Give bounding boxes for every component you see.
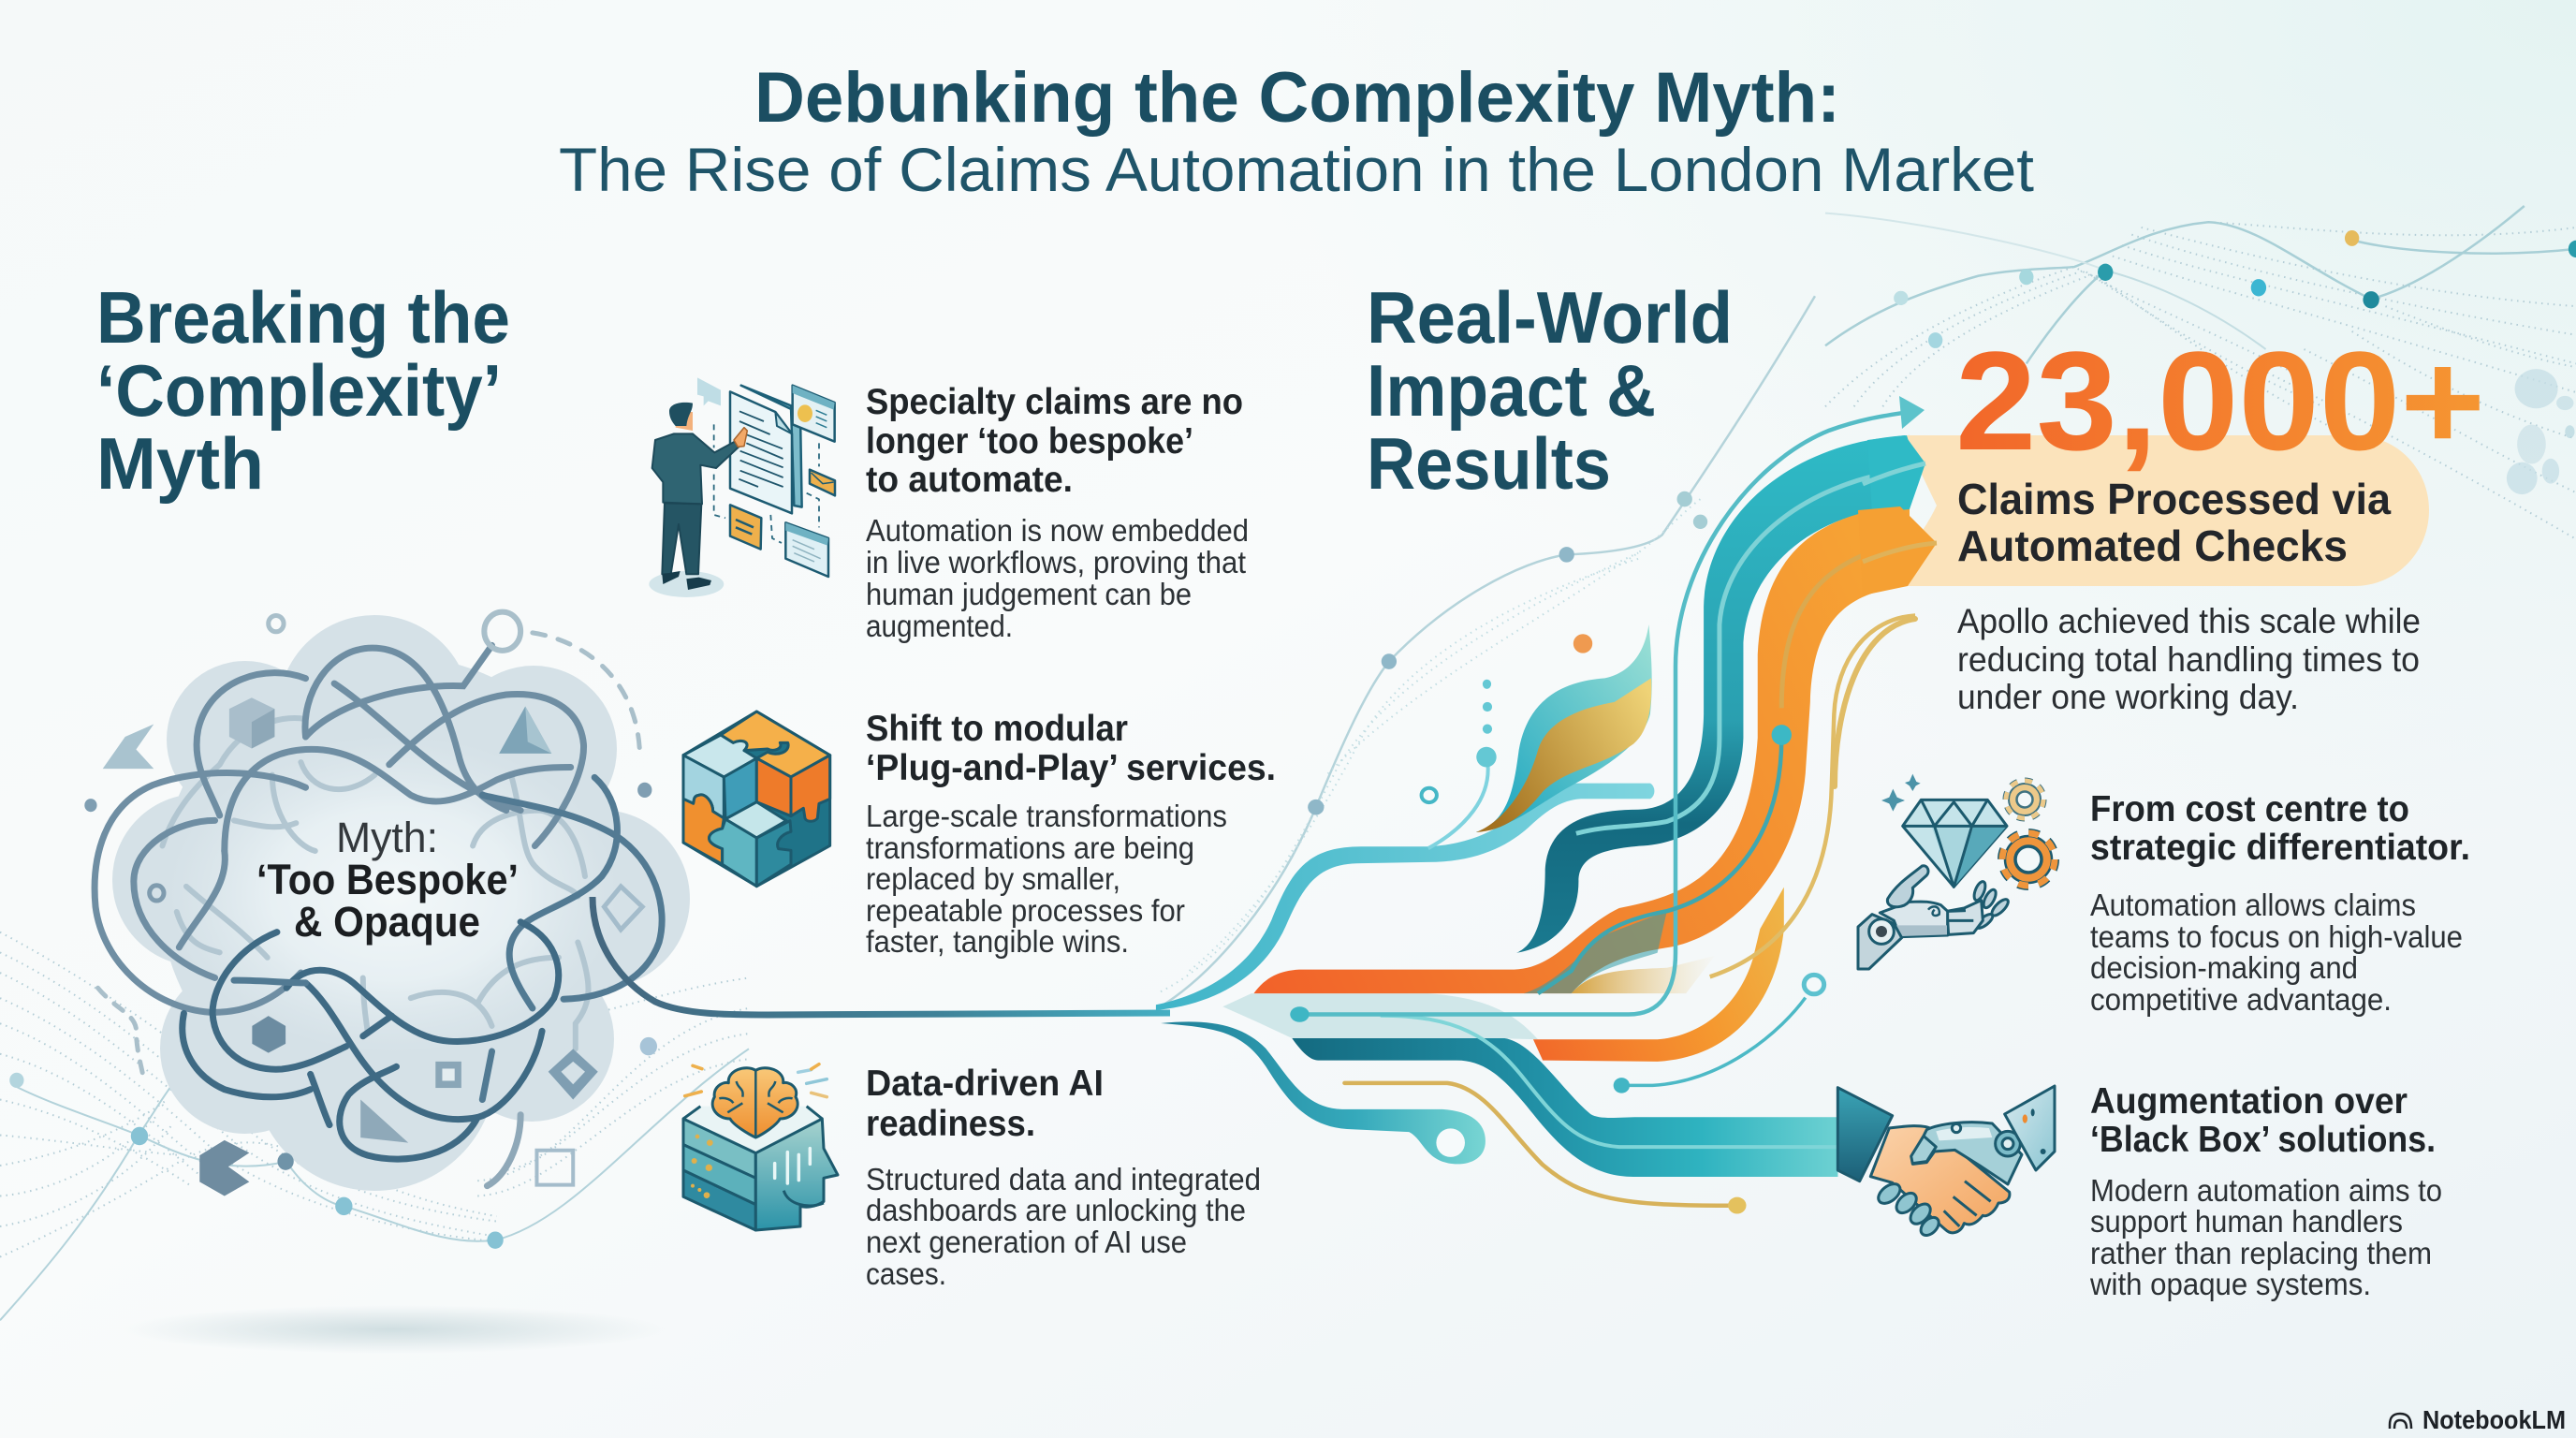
text: AI readiness: Data-driven AI — [866, 1064, 1104, 1104]
myth label: & Opaque — [294, 898, 480, 946]
text: strategic differentiator — [2090, 789, 2470, 1017]
heading: breaking the complexity myth: Breaking the — [96, 276, 510, 359]
tangled lines — [95, 612, 662, 1186]
text: augmentation: support human handlers — [2090, 1204, 2403, 1239]
lower curl ribbon — [1161, 1021, 1486, 1164]
icon: human and robot handshake — [1837, 1086, 2055, 1239]
text: AI readiness: next generation of AI use — [866, 1225, 1187, 1259]
icon: NotebookLM logo — [2390, 1414, 2411, 1429]
text: specialty claims: in live workflows, proving that — [866, 545, 1246, 580]
heading: real-world impact and results: Impact & — [1367, 349, 1656, 432]
heading: breaking the complexity myth — [96, 276, 510, 505]
stat label — [1957, 475, 2391, 570]
icon: man with documents — [649, 377, 835, 597]
title: Debunking the Complexity Myth: — [754, 58, 1840, 138]
icon: diamond and robot hand — [1858, 774, 2011, 969]
text: modular services: ‘Plug-and-Play’ services. — [866, 748, 1276, 788]
gold line — [1710, 615, 1915, 976]
title — [559, 58, 2034, 204]
small shapes around the knot — [9, 697, 657, 1249]
cloud shape — [112, 615, 690, 1191]
text: specialty claims: human judgement can be — [866, 577, 1192, 611]
text: AI readiness — [866, 1064, 1261, 1291]
text: strategic differentiator: decision-making and — [2090, 950, 2358, 985]
dark to teal main ribbon — [1516, 435, 1910, 953]
text: specialty claims: augmented. — [866, 609, 1013, 643]
title: The Rise of Claims Automation in the London Market — [559, 135, 2034, 204]
heading: real-world impact and results: Real-World — [1367, 276, 1733, 359]
text: augmentation: ‘Black Box’ solutions. — [2090, 1120, 2436, 1160]
text: specialty claims: Specialty claims are no — [866, 382, 1243, 422]
heading: breaking the complexity myth: ‘Complexity’ — [96, 349, 502, 432]
text: modular services: replaced by smaller, — [866, 861, 1120, 896]
text: modular services — [866, 709, 1276, 959]
text: AI readiness: readiness. — [866, 1104, 1035, 1144]
orange main ribbon — [1253, 506, 1910, 993]
text: specialty claims: to automate. — [866, 460, 1073, 500]
teal connector — [1621, 998, 1806, 1085]
text: modular services: transformations are being — [866, 830, 1194, 865]
text: augmentation: Augmentation over — [2090, 1081, 2408, 1122]
stat label: Automated Checks — [1957, 521, 2348, 570]
text: strategic differentiator: competitive advantage. — [2090, 982, 2392, 1017]
flame — [1476, 624, 1652, 832]
panel: tangled myth cloud — [9, 612, 690, 1249]
gold lower line — [1344, 1083, 1736, 1206]
text: modular services: Large-scale transformations — [866, 799, 1227, 833]
stat description: under one working day. — [1957, 678, 2299, 716]
text: specialty claims — [866, 382, 1249, 643]
heading: breaking the complexity myth: Myth — [96, 422, 264, 505]
light teal ribbon — [1156, 784, 1654, 1010]
text: augmentation: with opaque systems. — [2089, 1267, 2371, 1301]
text: AI readiness: cases. — [866, 1256, 946, 1291]
text: modular services: faster, tangible wins. — [866, 924, 1129, 959]
ribbon arrow heads — [1858, 396, 1937, 595]
text: strategic differentiator: teams to focus on high-value — [2090, 919, 2463, 954]
pale band — [1222, 993, 1538, 1039]
stat description — [1957, 602, 2421, 716]
thin teal arrow line — [1299, 413, 1906, 1014]
arrow: main line from myth to flow — [593, 897, 1170, 1015]
text: specialty claims: Automation is now embedded — [866, 513, 1249, 548]
myth label — [256, 814, 519, 946]
icon: puzzle cube — [683, 712, 830, 887]
myth label: ‘Too Bespoke’ — [256, 856, 519, 903]
big number: 23,000+ — [1955, 322, 2485, 479]
text: strategic differentiator: strategic differentiator. — [2090, 828, 2470, 868]
gold line end — [1835, 619, 1915, 786]
network lines top right — [1825, 206, 2576, 494]
lower teal ribbon — [1292, 1038, 1837, 1177]
nodes — [1573, 634, 1592, 653]
heading: real-world impact and results — [1367, 276, 1733, 505]
text: modular services: repeatable processes for — [866, 893, 1185, 928]
thin line in orange — [1538, 738, 1781, 993]
stat description: reducing total handling times to — [1957, 640, 2420, 679]
heading: real-world impact and results: Results — [1367, 422, 1611, 505]
text: augmentation: Modern automation aims to — [2090, 1173, 2442, 1208]
stat pill — [1872, 435, 2429, 586]
cloud highlight — [168, 735, 618, 1053]
stat label: Claims Processed via — [1957, 475, 2391, 523]
text: AI readiness: dashboards are unlocking the — [866, 1193, 1246, 1227]
icon: brain and server head — [683, 1064, 838, 1230]
lower orange ribbon — [1533, 888, 1784, 1062]
icon: gold gear — [2006, 781, 2043, 818]
text: AI readiness: Structured data and integrated — [866, 1162, 1261, 1196]
text: augmentation: rather than replacing them — [2090, 1236, 2432, 1270]
text: strategic differentiator: From cost centre to — [2090, 789, 2409, 829]
text: specialty claims: longer ‘too bespoke’ — [866, 421, 1193, 462]
flow ribbons chart — [1156, 296, 1915, 1214]
myth label: Myth: — [336, 814, 438, 861]
text: modular services: Shift to modular — [866, 709, 1128, 749]
icon: orange gear — [2002, 833, 2055, 886]
shadow under cloud — [122, 1305, 665, 1354]
text: augmentation — [2089, 1081, 2442, 1301]
text: strategic differentiator: Automation allows claims — [2090, 888, 2416, 922]
stat description: Apollo achieved this scale while — [1957, 602, 2421, 640]
